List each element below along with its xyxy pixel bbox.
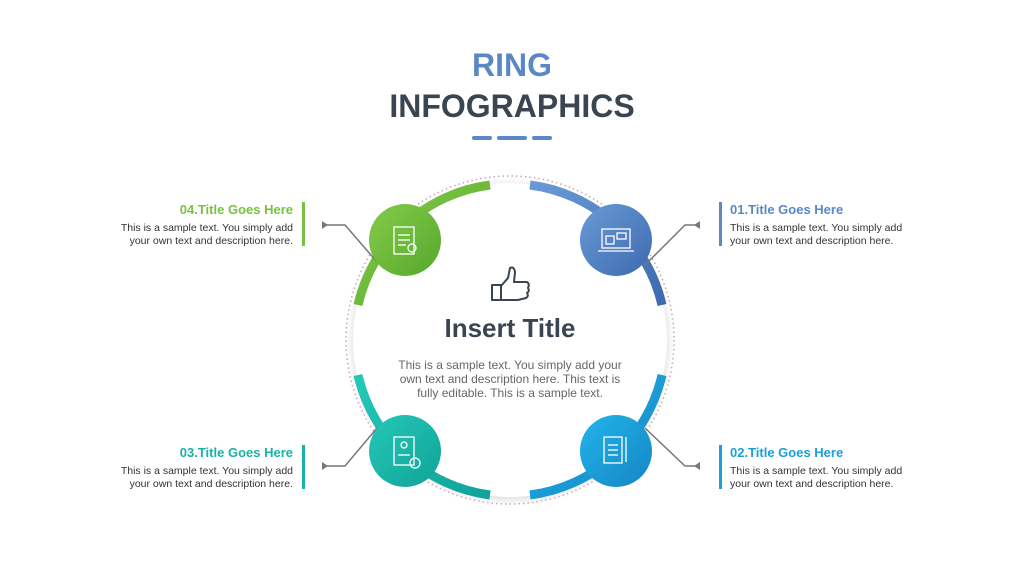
- title underline dashes: [472, 136, 552, 140]
- item 03: [121, 445, 305, 490]
- arcs: [358, 185, 662, 495]
- thumbs up icon: [492, 268, 529, 300]
- item 04: 04.Title Goes Here: [180, 202, 293, 217]
- connectors: [322, 225, 700, 466]
- icons: [394, 227, 634, 468]
- item 01: 01.Title Goes Here: [730, 202, 843, 217]
- center title: Insert Title: [444, 313, 576, 343]
- item 02: This is a sample text. You simply add your own text and description here.: [730, 465, 902, 490]
- item 03: This is a sample text. You simply add your own text and description here.: [121, 465, 293, 490]
- item 04: This is a sample text. You simply add your own text and description here.: [121, 222, 293, 247]
- title: [389, 47, 635, 124]
- item 01: [719, 202, 902, 247]
- item 03: 03.Title Goes Here: [180, 445, 293, 460]
- item 02: [719, 445, 902, 490]
- title: RING: [472, 47, 552, 83]
- center text: This is a sample text. You simply add your own text and description here. This text is fully editable. This is a sample text.: [398, 358, 622, 400]
- dotted outer circle: [346, 176, 674, 504]
- white disc: [352, 183, 668, 500]
- node circles: [369, 204, 652, 487]
- item 01: This is a sample text. You simply add your own text and description here.: [730, 222, 902, 247]
- title: INFOGRAPHICS: [389, 88, 635, 124]
- item 04: [121, 202, 305, 247]
- item 02: 02.Title Goes Here: [730, 445, 843, 460]
